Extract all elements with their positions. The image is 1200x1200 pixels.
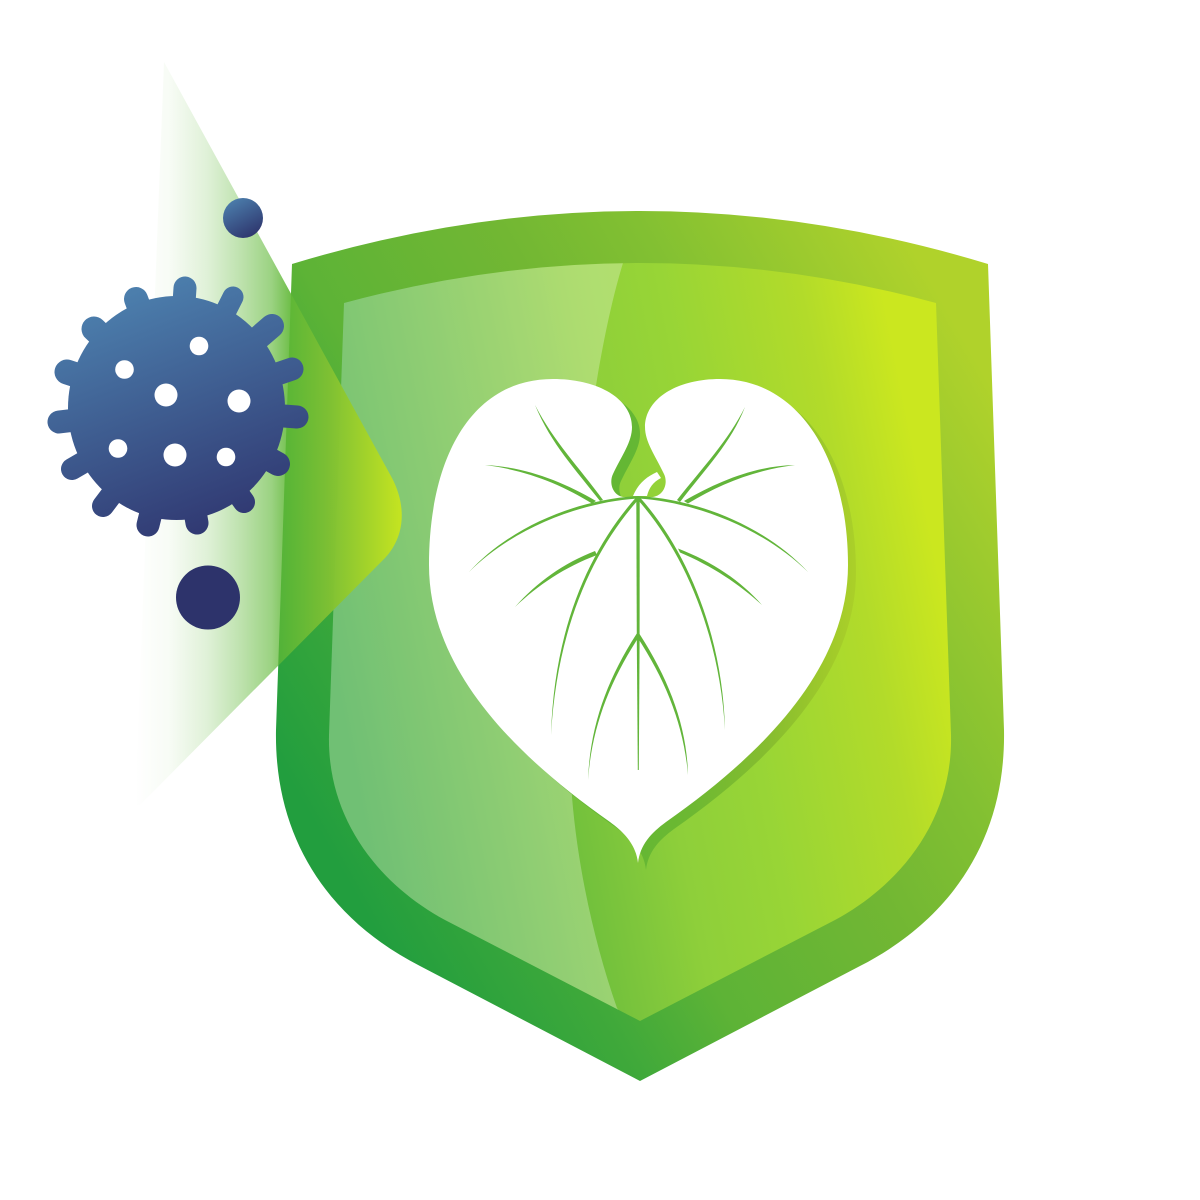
virus pores	[109, 337, 250, 466]
virus	[59, 288, 297, 525]
shield	[276, 211, 1004, 1081]
virus spikes	[59, 288, 297, 525]
leaf veins	[469, 405, 808, 780]
leaf	[429, 379, 856, 870]
shield glare	[329, 263, 623, 1010]
small virus particle	[223, 198, 263, 238]
shield outer rim	[276, 211, 1004, 1081]
leaf blade	[429, 379, 848, 863]
shield inner face	[329, 263, 951, 1021]
protective light beam	[135, 62, 402, 805]
virus core	[68, 296, 285, 520]
dark virus particle	[176, 566, 240, 630]
leaf stem curl	[633, 472, 661, 496]
leaf shadow	[437, 386, 856, 870]
